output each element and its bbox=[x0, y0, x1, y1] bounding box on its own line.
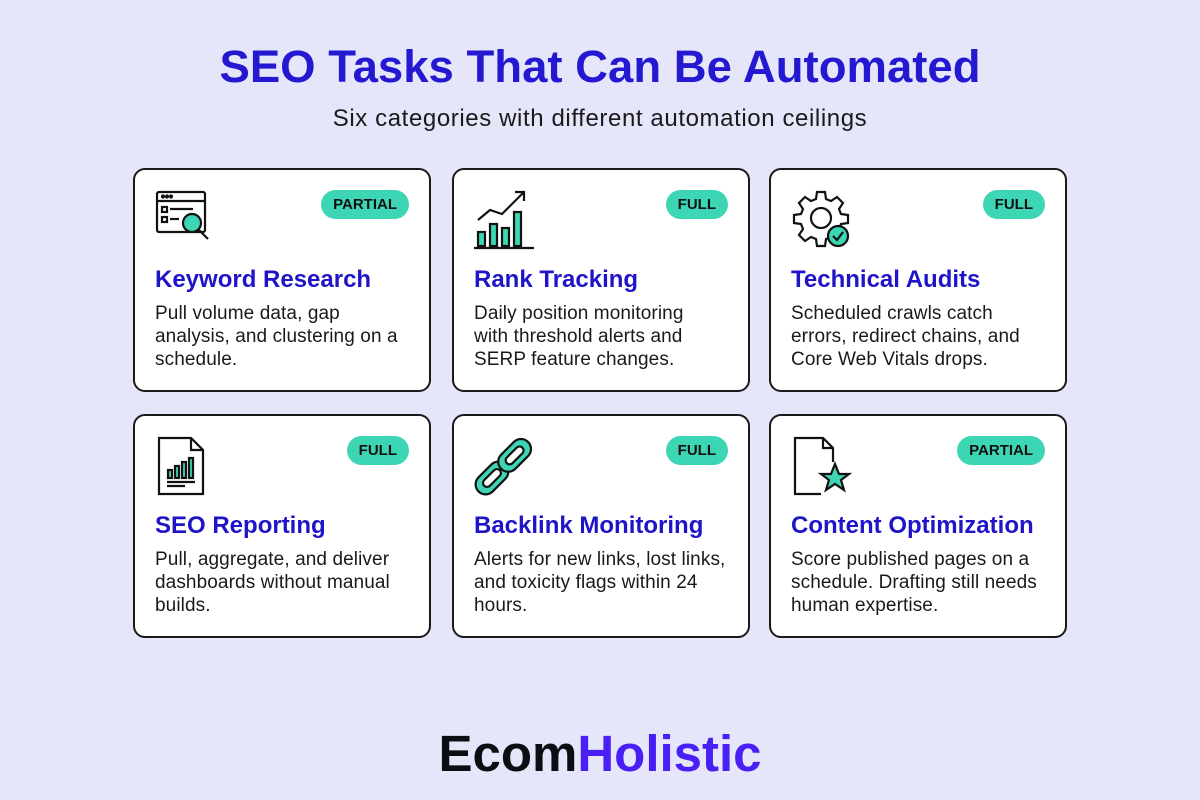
badge bbox=[347, 436, 409, 465]
card title: Content Optimization bbox=[791, 512, 1034, 539]
title: SEO Tasks That Can Be Automated bbox=[219, 41, 980, 92]
badge: FULL bbox=[359, 442, 397, 459]
card title: Technical Audits bbox=[791, 266, 980, 293]
badge: PARTIAL bbox=[969, 442, 1033, 459]
subtitle: Six categories with different automation ceilings bbox=[333, 105, 867, 132]
panel: rank tracking bbox=[452, 168, 750, 392]
panel: backlink monitoring bbox=[452, 414, 750, 638]
card body: Scheduled crawls catch errors, redirect chains, and Core Web Vitals drops. bbox=[791, 303, 1020, 370]
card title: Backlink Monitoring bbox=[474, 512, 703, 539]
panel: seo reporting bbox=[133, 414, 431, 638]
badge: PARTIAL bbox=[333, 196, 397, 213]
badge: FULL bbox=[678, 442, 716, 459]
icon: chain link bbox=[474, 438, 532, 496]
icon: document star bbox=[794, 436, 852, 496]
card body: Score published pages on a schedule. Drafting still needs human expertise. bbox=[791, 549, 1037, 616]
panel: technical audits bbox=[769, 168, 1067, 392]
icon: gear check bbox=[792, 190, 850, 248]
badge: FULL bbox=[678, 196, 716, 213]
badge bbox=[666, 190, 728, 219]
badge bbox=[321, 190, 409, 219]
badge bbox=[957, 436, 1045, 465]
badge bbox=[666, 436, 728, 465]
icon: bar chart bbox=[474, 190, 534, 250]
panel: content optimization bbox=[769, 414, 1067, 638]
icon: report document bbox=[158, 436, 204, 496]
card title: Rank Tracking bbox=[474, 266, 638, 293]
card title: SEO Reporting bbox=[155, 512, 326, 539]
card body: Alerts for new links, lost links, and toxicity flags within 24 hours. bbox=[474, 549, 725, 616]
card body: Pull, aggregate, and deliver dashboards without manual builds. bbox=[155, 549, 390, 616]
card title: Keyword Research bbox=[155, 266, 371, 293]
panel: keyword research bbox=[133, 168, 431, 392]
icon: keyword search bbox=[156, 190, 209, 240]
card body: Daily position monitoring with threshold alerts and SERP feature changes. bbox=[474, 303, 684, 370]
card body: Pull volume data, gap analysis, and clustering on a schedule. bbox=[155, 303, 398, 370]
logo: EcomHolistic bbox=[438, 725, 762, 782]
badge: FULL bbox=[995, 196, 1033, 213]
badge bbox=[983, 190, 1045, 219]
